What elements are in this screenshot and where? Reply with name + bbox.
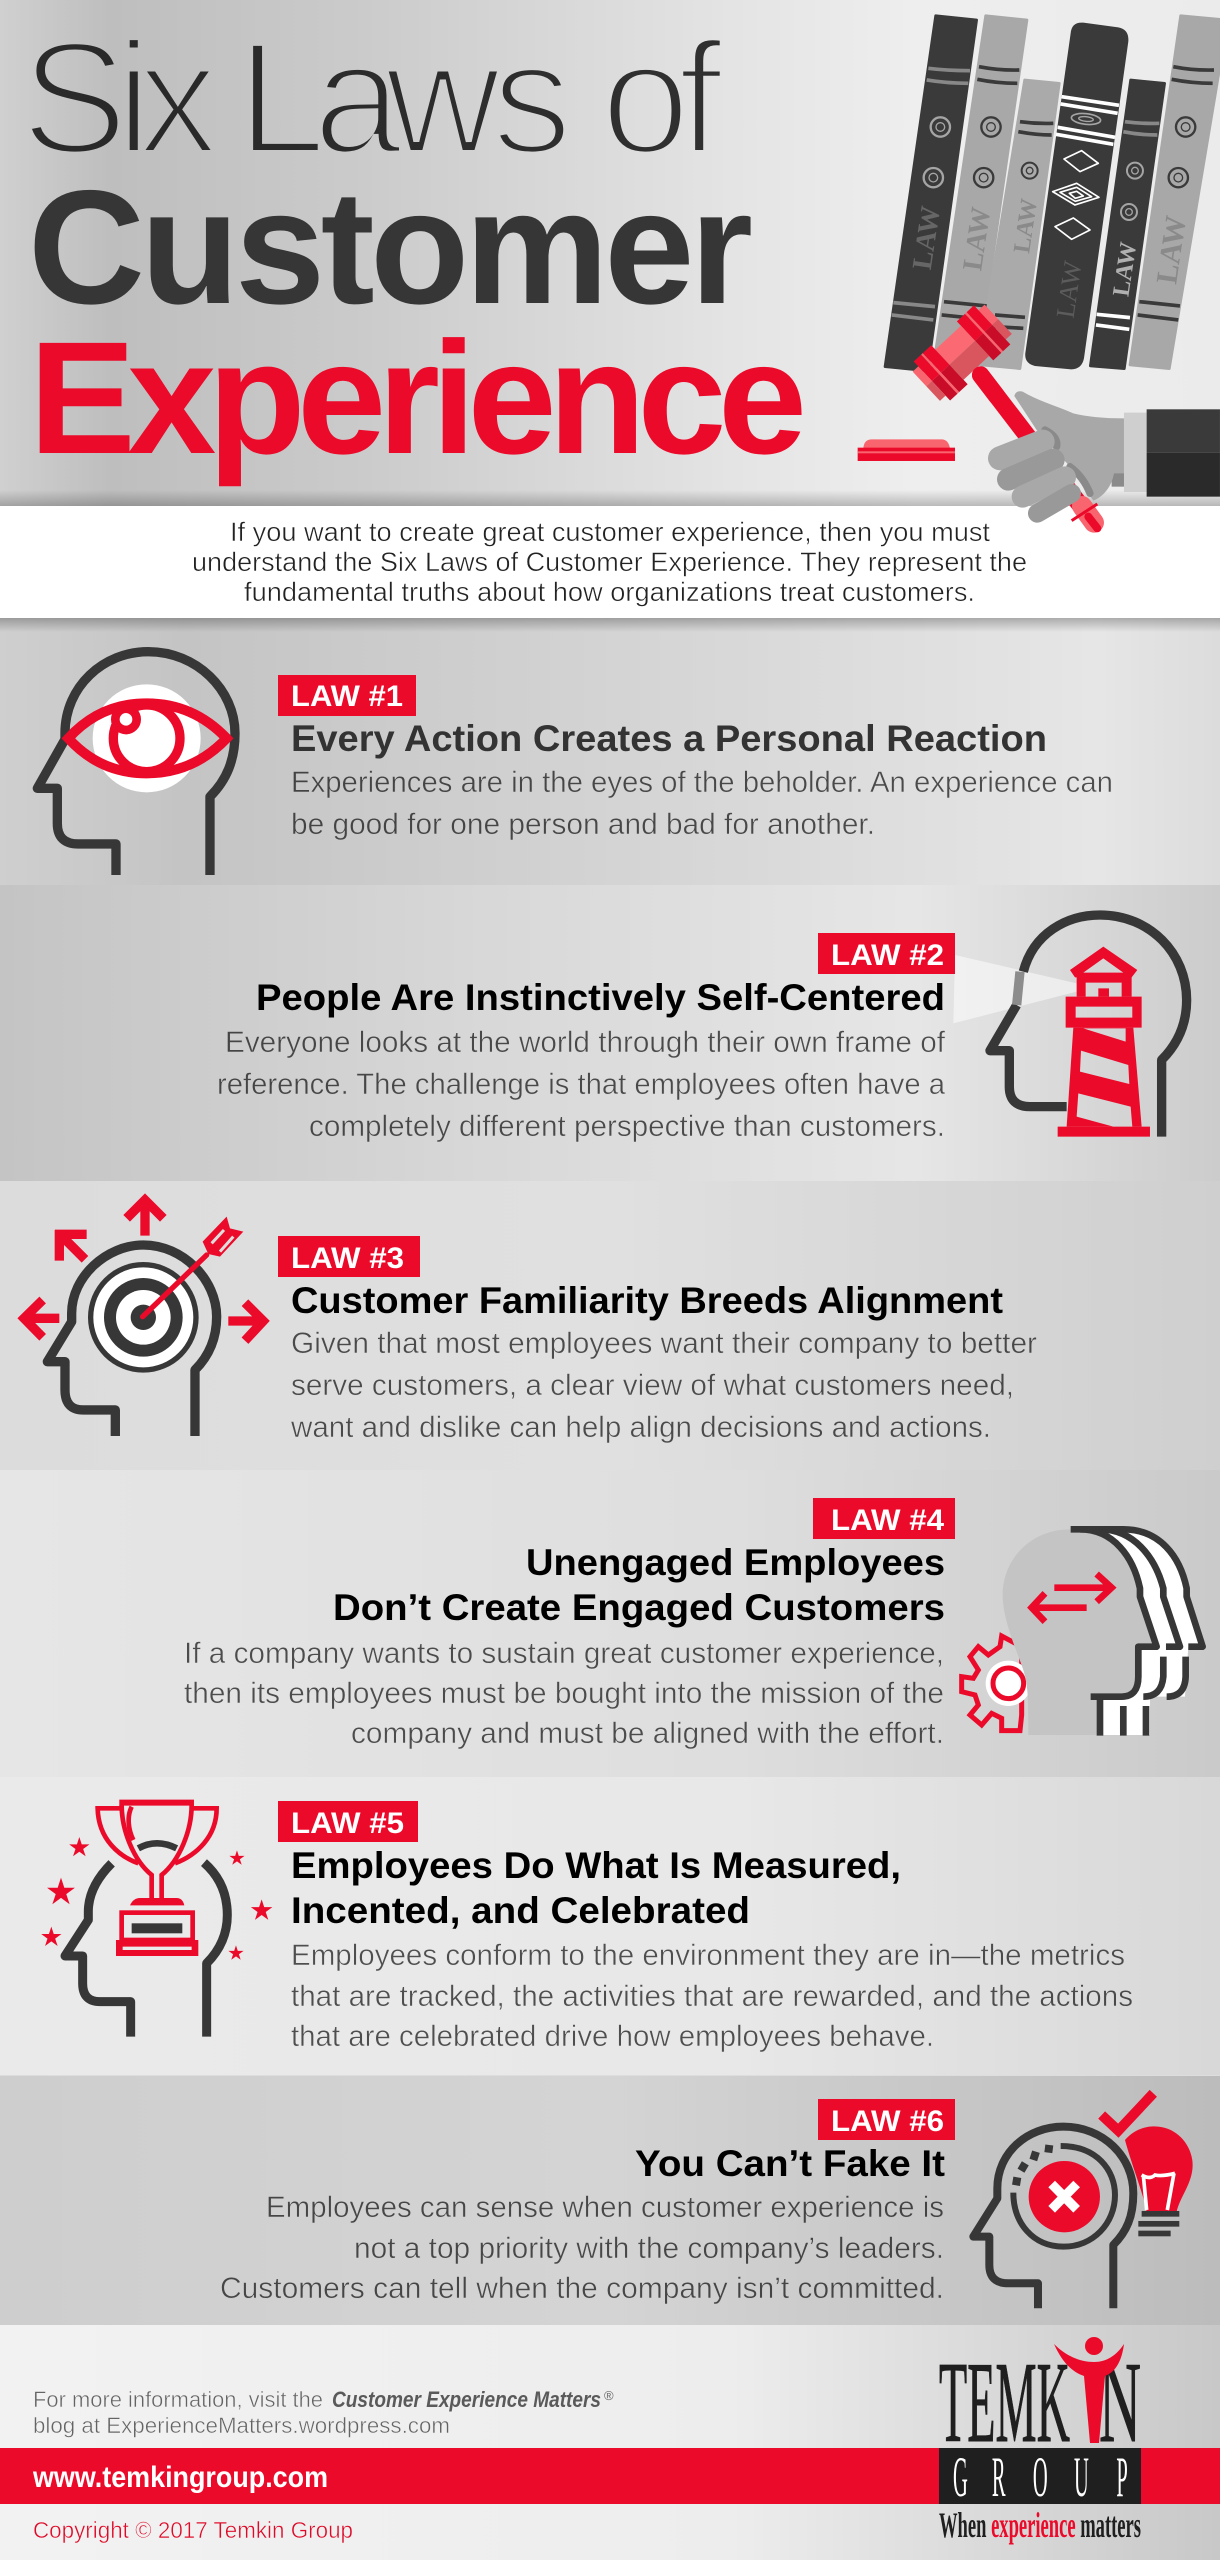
text: law 1: be good for one person and bad for another.: [291, 808, 875, 841]
logo: Temkin Group: GROUP: [953, 2447, 1128, 2509]
text: law 4: then its employees must be bought into the mission of the: [184, 1677, 944, 1710]
heading: law 1: Every Action Creates a Personal Reaction: [291, 718, 1047, 759]
text: law 3: want and dislike can help align decisions and actions.: [290, 1411, 991, 1444]
intro text: understand the Six Laws of Customer Experience. They represent the: [192, 547, 1027, 577]
text: law 2: completely different perspective than customers.: [309, 1110, 945, 1143]
footer bar: [0, 2448, 1220, 2504]
heading: law 5: Incented, and Celebrated: [291, 1890, 750, 1931]
text: law 3: serve customers, a clear view of what customers need,: [291, 1369, 1014, 1402]
footer text: blog information: [33, 2387, 614, 2438]
text: law 3: Given that most employees want their company to better: [291, 1327, 1037, 1360]
text: law 5: that are celebrated drive how employees behave.: [291, 2020, 934, 2053]
heading: law 4: Don’t Create Engaged Customers: [333, 1587, 945, 1628]
logo: Temkin Group: [939, 2337, 1141, 2545]
panel: law 3: [0, 1181, 1220, 1470]
fingers: [1000, 430, 1090, 513]
logo: Temkin Group: N: [1099, 2339, 1141, 2466]
heading: law 4: [333, 1542, 945, 1628]
book spine labels: LAW: [1109, 240, 1142, 298]
gavel, sound block and hand: [858, 300, 1220, 528]
icon: head with eye: [37, 652, 235, 875]
books: [885, 16, 1220, 371]
heading: law 2: People Are Instinctively Self-Centered: [256, 977, 945, 1018]
panel: law 1: [0, 618, 1220, 885]
panel: law 6: [0, 2076, 1220, 2325]
badge: law 1: LAW #1: [291, 680, 403, 713]
panel: law 5: [0, 1777, 1220, 2075]
heading: law 6: You Can’t Fake It: [635, 2143, 945, 2184]
icon: head with x, check and bulb: [973, 2093, 1193, 2308]
badge: law 5: [278, 1801, 418, 1842]
text: law 2: Everyone looks at the world through their own frame of: [225, 1026, 946, 1059]
icon: head with target and arrows: [24, 1200, 263, 1436]
gavel: [908, 300, 1097, 528]
text: law 4: [184, 1637, 944, 1750]
badge: law 2: [818, 933, 955, 974]
text: law 4: company and must be aligned with the effort.: [351, 1717, 944, 1750]
text: law 6: Customers can tell when the company isn’t committed.: [220, 2272, 944, 2305]
text: law 5: that are tracked, the activities that are rewarded, and the actions: [291, 1980, 1133, 2013]
badge: law 6: [818, 2099, 955, 2140]
intro text: fundamental truths about how organizations treat customers.: [244, 577, 975, 607]
footer text: blog information: Customer Experience Matters: [332, 2387, 601, 2412]
header panel: [0, 0, 1220, 506]
badge: law 1: [278, 675, 416, 716]
panel: law 2: [0, 885, 1220, 1181]
footer text: blog information: ®: [604, 2388, 614, 2403]
footer text: blog information: For more information, visit the: [33, 2387, 323, 2412]
book spine labels: [907, 197, 1193, 320]
text: law 6: Employees can sense when customer experience is: [266, 2191, 944, 2224]
text: law 1: Experiences are in the eyes of the beholder. An experience can: [291, 766, 1113, 799]
intro strip: [0, 506, 1220, 632]
book spine labels: LAW: [957, 205, 997, 273]
hand: palm and sleeve: [1014, 391, 1220, 501]
sound block: [858, 439, 955, 461]
title: Customer: Customer: [28, 157, 753, 338]
text: law 2: reference. The challenge is that employees often have a: [217, 1068, 946, 1101]
footer panel: [0, 2325, 1220, 2560]
copyright: Copyright © 2017 Temkin Group: [33, 2517, 353, 2543]
badge: law 2: LAW #2: [831, 939, 944, 972]
badge: law 6: LAW #6: [831, 2105, 944, 2138]
badge: law 3: [278, 1236, 420, 1277]
badge: law 5: LAW #5: [291, 1807, 404, 1840]
book spine labels: LAW: [1051, 259, 1088, 320]
badge: law 4: [813, 1498, 955, 1539]
icon: heads with gear: [962, 1529, 1203, 1736]
text: law 5: Employees conform to the environment they are in—the metrics: [291, 1939, 1125, 1972]
text: law 3: [290, 1327, 1037, 1444]
panel: law 4: [0, 1470, 1220, 1777]
text: law 1: [291, 766, 1113, 841]
website url: www.temkingroup.com: [32, 2461, 328, 2494]
badge: law 3: LAW #3: [291, 1242, 404, 1275]
text: law 4: If a company wants to sustain great customer experience,: [184, 1637, 944, 1670]
icon: head with trophy and stars: [41, 1803, 272, 2037]
icon: head with lighthouse: [953, 915, 1187, 1137]
book spine labels: LAW: [907, 204, 947, 272]
illustration: law books, gavel and hand: [858, 16, 1220, 528]
badge: law 4: LAW #4: [831, 1504, 944, 1537]
book spine labels: LAW: [1150, 214, 1193, 286]
heading: law 3: Customer Familiarity Breeds Alignment: [291, 1280, 1003, 1321]
text: law 6: [220, 2191, 944, 2305]
footer text: blog information: blog at ExperienceMatters.wordpress.com: [33, 2413, 450, 2438]
text: law 6: not a top priority with the company’s leaders.: [354, 2232, 944, 2265]
title: Six Laws of: Six Laws of: [21, 8, 723, 187]
text: law 2: [217, 1026, 946, 1143]
logo: Temkin Group: When experience matters: [939, 2505, 1141, 2545]
title: Experience: Experience: [29, 308, 807, 487]
heading: law 5: [291, 1845, 901, 1931]
heading: law 5: Employees Do What Is Measured,: [291, 1845, 901, 1886]
heading: law 4: Unengaged Employees: [526, 1542, 945, 1583]
text: law 5: [291, 1939, 1133, 2053]
book spine labels: LAW: [1009, 197, 1043, 255]
intro text: [192, 517, 1027, 607]
intro text: If you want to create great customer experience, then you must: [230, 517, 990, 547]
